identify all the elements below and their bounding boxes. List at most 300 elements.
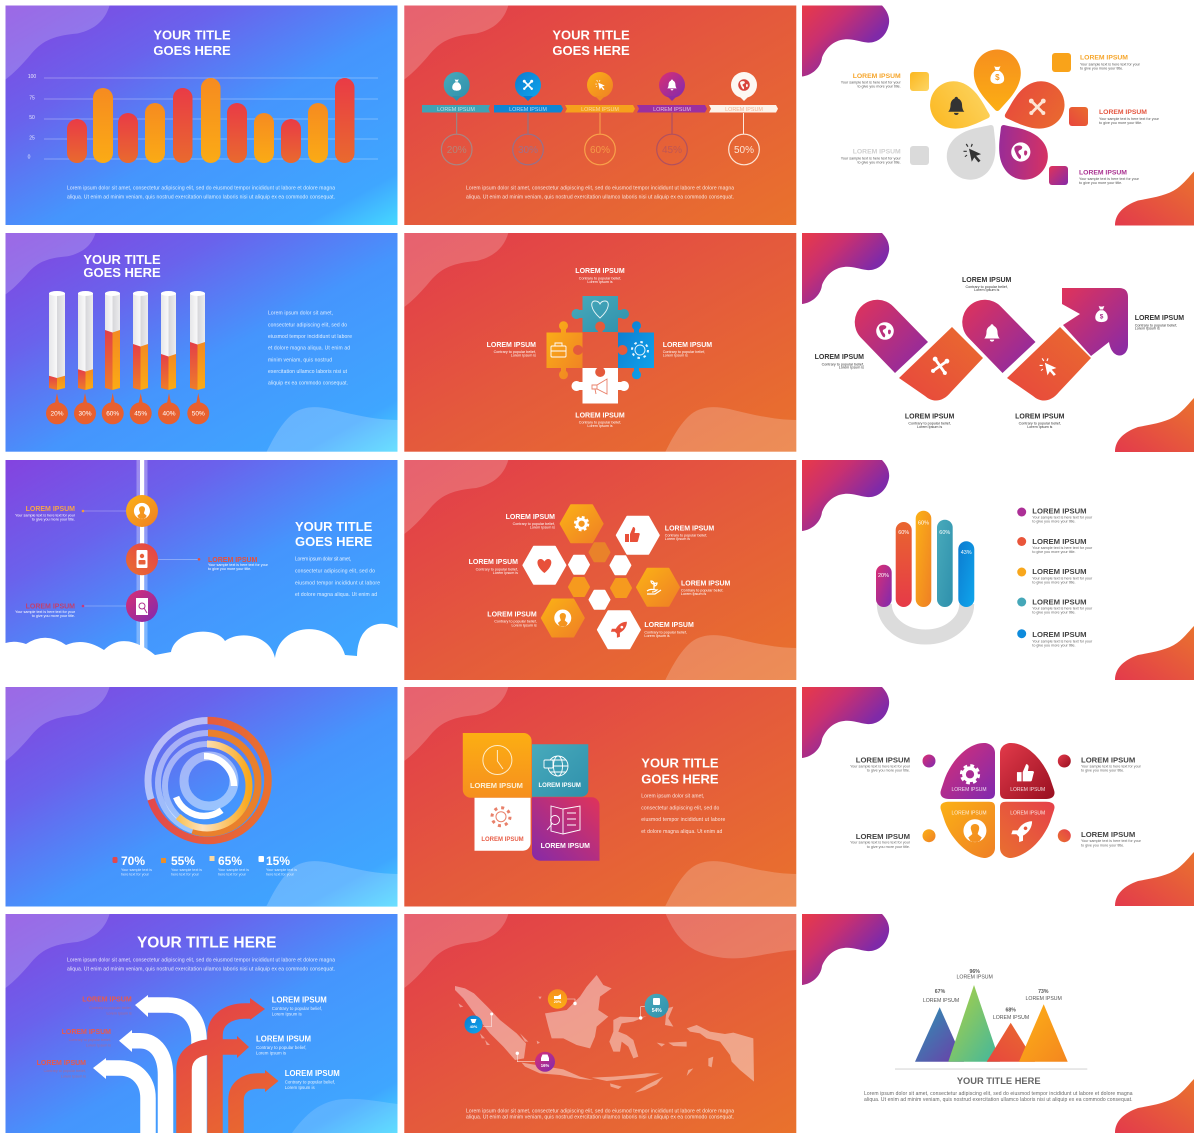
legend: purple (1049, 166, 1140, 185)
legend: red: to give you more your title. (1099, 121, 1142, 125)
legend 70%: here text for your (121, 872, 150, 876)
legend: red: Your sample text is here text for your (1099, 117, 1160, 121)
legend row 5: to give you more your title. (1032, 644, 1076, 648)
label: top (962, 277, 1012, 292)
legend: orange (1052, 53, 1141, 72)
panel: white triangle chart slide (802, 914, 1194, 1133)
card: clock: LOREM IPSUM (470, 781, 523, 790)
hand chart: 60% (918, 520, 929, 526)
legend row 4 (1017, 598, 1093, 614)
triangle labels: 67% (935, 989, 946, 995)
body text (295, 556, 380, 598)
body text: Lorem ipsum dolor sit amet, (641, 794, 704, 800)
label: bottom left: LOREM IPSUM (856, 832, 910, 841)
label: left: Lorem Ipsum is (511, 354, 536, 358)
pin: teal 54%: 54% (652, 1008, 662, 1014)
label 3: Lorem Ipsum is (493, 571, 518, 575)
timeline step 1 (422, 72, 490, 165)
body text: Lorem ipsum dolor sit amet, consectetur adipiscing elit, sed do eiusmod tempor incididunt ut labore et dolore magna (67, 186, 335, 192)
legend row 1: to give you more your title. (1032, 520, 1076, 524)
title: your title here: YOUR TITLE HERE (957, 1076, 1041, 1086)
title: your title goes here (83, 252, 161, 280)
title: your title goes here (295, 519, 373, 549)
milestone 2: LOREM IPSUM (208, 557, 258, 564)
label: top: LOREM IPSUM (962, 277, 1012, 284)
legend row 2: LOREM IPSUM (1032, 537, 1087, 546)
body text: consectetur adipiscing elit, sed do (641, 806, 720, 812)
left label 3: LOREM IPSUM (37, 1060, 86, 1067)
label 5: Contrary to popular belief, (494, 620, 537, 624)
pin: orange 20% (548, 989, 577, 1009)
label: top: Lorem Ipsum is (587, 280, 613, 284)
legend: purple: Your sample text is here text for your (1079, 177, 1140, 181)
body text: et dolore magna aliqua. Ut enim ad (295, 592, 377, 598)
milestone 3 (15, 590, 158, 622)
timeline step 4: LOREM IPSUM (653, 107, 691, 113)
label 3: Contrary to popular belief, (476, 568, 518, 572)
percentage pins: 60% (106, 411, 119, 418)
legend: yellow: to give you more your title. (857, 84, 901, 88)
label: top: Lorem Ipsum is (974, 288, 999, 292)
label 3 (469, 559, 518, 575)
title: your title goes here: GOES HERE (83, 265, 161, 280)
legend 65%: here text for your (218, 872, 247, 876)
body text (466, 186, 734, 200)
left label 3 (37, 1060, 86, 1078)
milestone 1: LOREM IPSUM (26, 506, 75, 513)
timeline step 5: LOREM IPSUM (725, 107, 763, 113)
body text: Lorem ipsum dolor sit amet, (295, 556, 351, 562)
legend: orange: LOREM IPSUM (1080, 54, 1128, 62)
body text: eiusmod tempor incididunt ut labore (641, 817, 726, 823)
right label 1: Contrary to popular belief, (272, 1006, 322, 1011)
body text: et dolore magna aliqua. Ut enim ad (268, 346, 350, 352)
bar chart: 0 (28, 154, 31, 160)
legend: gray: LOREM IPSUM (853, 148, 901, 156)
legend 70%: 70% (121, 854, 145, 868)
legend 65% (210, 854, 249, 876)
legend 55%: 55% (171, 854, 195, 868)
legend: red: LOREM IPSUM (1099, 109, 1147, 116)
label: top left (850, 754, 936, 773)
panel: blue concentric rings slide (6, 687, 398, 906)
quadrant diagram: LOREM IPSUM (951, 810, 987, 816)
right label 1: LOREM IPSUM (272, 996, 327, 1004)
label: bottom left: Lorem Ipsum is (917, 425, 942, 429)
label: top left: LOREM IPSUM (856, 756, 910, 764)
zigzag arrow diagram: $ (1100, 314, 1104, 320)
label 2: LOREM IPSUM (665, 526, 714, 532)
label 4: Contrary to popular belief, (681, 589, 723, 593)
card: globe (532, 744, 588, 797)
label: bottom left: Your sample text is here text for your (850, 841, 911, 845)
left label 1: Lorem Ipsum is (106, 1012, 132, 1016)
legend row 4: LOREM IPSUM (1032, 598, 1087, 606)
left label 2: Lorem Ipsum is (86, 1044, 111, 1048)
triangle labels: LOREM IPSUM (957, 974, 993, 980)
label: bottom right: Lorem Ipsum is (1027, 425, 1053, 429)
right label 2 (256, 1034, 311, 1056)
panel: blue sky timeline slide (6, 460, 398, 681)
label 6 (644, 622, 694, 638)
label 1: Contrary to popular belief, (513, 522, 555, 526)
label 1: Lorem Ipsum is (530, 526, 555, 530)
panel: red cards slide (404, 687, 796, 906)
legend: orange: Your sample text is here text for your (1080, 62, 1141, 66)
body text: aliquip ex ea commodo consequat. (268, 381, 348, 387)
body text: exercitation ullamco laboris nisi ut (268, 369, 348, 375)
timeline step 2 (494, 72, 563, 165)
label: bottom left: to give you more your title. (867, 845, 910, 849)
card: gear (474, 798, 531, 851)
legend 70% (112, 854, 152, 876)
hand chart (876, 511, 974, 637)
body text: et dolore magna aliqua. Ut enim ad (641, 829, 723, 835)
title: your title goes here: YOUR TITLE (153, 28, 231, 42)
body text: aliqua. Ut enim ad minim veniam, quis nostrud exercitation ullamco laboris nisi ut aliquip ex ea commodo consequat. (466, 194, 734, 200)
legend: red (1069, 107, 1160, 126)
title: your title goes here: YOUR TITLE (83, 252, 161, 267)
label: bottom left (850, 829, 936, 849)
label: right (1135, 315, 1184, 331)
timeline step 3: 60% (590, 145, 610, 156)
pin: blue 40%: 40% (470, 1025, 478, 1029)
label: top left: to give you more your title. (867, 769, 910, 773)
legend row 2 (1017, 537, 1093, 554)
right label 3: Lorem Ipsum is (285, 1085, 316, 1090)
body text: consectetur adipiscing elit, sed do (295, 568, 375, 574)
timeline step 3: LOREM IPSUM (581, 107, 619, 113)
legend 15%: Your sample text is (266, 868, 297, 872)
label: bottom left: LOREM IPSUM (905, 414, 954, 420)
milestone 3: Your sample text is here text for your (15, 610, 76, 614)
body text: Lorem ipsum dolor sit amet, (268, 310, 333, 316)
label: bottom: Contrary to popular belief, (579, 420, 621, 424)
right label 3: Contrary to popular belief, (285, 1080, 335, 1084)
timeline step 1: 20% (447, 145, 467, 156)
body text: minim veniam, quis nostrud (268, 358, 332, 364)
left label 3: Lorem Ipsum is (61, 1074, 86, 1078)
milestone 1: Your sample text is here text for your (15, 514, 76, 518)
card: book: LOREM IPSUM (541, 843, 590, 850)
timeline step 5 (709, 72, 778, 165)
milestone 1: to give you more your title. (32, 518, 75, 522)
label: top right: Your sample text is here text for your (1081, 764, 1142, 768)
title: your title goes here: GOES HERE (153, 43, 231, 58)
vertical beam (136, 460, 148, 655)
label: left: LOREM IPSUM (815, 354, 864, 361)
pin: teal 54% (639, 994, 669, 1020)
left label 1: Contrary to popular belief, (89, 1006, 132, 1010)
legend 65%: 65% (218, 854, 242, 868)
body text: Lorem ipsum dolor sit amet, consectetur adipiscing elit, sed do eiusmod tempor incididunt ut labore et dolore magna (67, 958, 335, 964)
timeline step 3 (565, 72, 635, 165)
legend: orange: to give you more your title. (1080, 66, 1123, 70)
panel: blue bar chart slide (6, 6, 398, 225)
label: bottom left: Contrary to popular belief, (908, 422, 951, 426)
legend row 3: LOREM IPSUM (1032, 567, 1087, 576)
triangle chart (915, 985, 1068, 1062)
hexagon icons (537, 517, 661, 638)
white arrows (93, 995, 199, 1133)
body text: aliqua. Ut enim ad minim veniam, quis nostrud exercitation ullamco laboris nisi ut aliquip ex ea commodo consequat. (466, 1114, 734, 1120)
legend row 3 (1017, 567, 1093, 584)
label: bottom: Lorem Ipsum is (587, 424, 613, 428)
label 4 (681, 580, 731, 596)
body text: aliqua. Ut enim ad minim veniam, quis nostrud exercitation ullamco laboris nisi ut aliquip ex ea commodo consequat. (864, 1097, 1132, 1103)
baseline (895, 1068, 1087, 1070)
label: top right (1058, 754, 1142, 773)
label 6: Contrary to popular belief, (644, 630, 687, 634)
title: your title goes here: GOES HERE (641, 772, 719, 786)
panel: white flower slide (802, 6, 1194, 226)
card: clock (463, 733, 532, 798)
label: top right: to give you more your title. (1081, 769, 1124, 773)
label 3: LOREM IPSUM (469, 559, 518, 566)
timeline step 2: LOREM IPSUM (509, 107, 547, 113)
quadrant diagram: LOREM IPSUM (1010, 787, 1045, 793)
panel: blue arrows slide (6, 914, 398, 1133)
panel: red puzzle slide (404, 233, 796, 452)
panel: white hand chart slide (802, 460, 1194, 680)
timeline step 4: 45% (662, 145, 682, 156)
panel: red hexagon slide (404, 460, 796, 680)
bar chart (28, 74, 378, 163)
label 2 (665, 526, 714, 541)
title: your title goes here: YOUR TITLE (295, 519, 373, 534)
milestone 3: to give you more your title. (32, 614, 75, 618)
legend row 3: Your sample text is here text for your (1032, 576, 1093, 580)
label 5: LOREM IPSUM (487, 612, 537, 618)
right label 3 (285, 1069, 340, 1090)
label: top right: LOREM IPSUM (1081, 756, 1135, 764)
label: right: LOREM IPSUM (663, 342, 712, 349)
body text: eiusmod tempor incididunt ut labore (295, 580, 380, 586)
left label 1 (82, 996, 132, 1016)
body text: aliqua. Ut enim ad minim veniam, quis nostrud exercitation ullamco laboris nisi ut aliquip ex ea commodo consequat. (67, 966, 335, 972)
label: top (575, 268, 625, 284)
body text (67, 958, 335, 972)
percentage pins: 30% (78, 411, 92, 418)
percentage pins: 50% (192, 411, 205, 418)
title: your title goes here: YOUR TITLE (552, 28, 630, 42)
body text (864, 1091, 1133, 1103)
legend 15%: here text for your (266, 872, 295, 876)
timeline step 1: LOREM IPSUM (437, 107, 475, 113)
label 5: Lorem Ipsum is (511, 624, 537, 628)
label: bottom right: LOREM IPSUM (1015, 414, 1065, 420)
flower diagram (924, 50, 1071, 189)
legend: gray: Your sample text is here text for your (841, 156, 901, 160)
label: right: Lorem Ipsum is (1135, 327, 1160, 331)
label: right: Contrary to popular belief, (1135, 324, 1177, 328)
legend row 5: Your sample text is here text for your (1032, 640, 1093, 644)
label: bottom: LOREM IPSUM (575, 412, 625, 420)
body text: Lorem ipsum dolor sit amet, consectetur adipiscing elit, sed do eiusmod tempor incididunt ut labore et dolore magna (466, 186, 734, 192)
body text: aliqua. Ut enim ad minim veniam, quis nostrud exercitation ullamco laboris nisi ut aliquip ex ea commodo consequat. (67, 194, 335, 200)
hand chart: 60% (898, 530, 909, 536)
right label 3: LOREM IPSUM (285, 1069, 340, 1078)
legend: purple: LOREM IPSUM (1079, 170, 1127, 176)
quadrant diagram (940, 743, 1055, 858)
label: top: Contrary to popular belief, (965, 285, 1008, 289)
title: your title goes here (153, 28, 231, 58)
right label 2: Contrary to popular belief, (256, 1045, 307, 1050)
triangle labels: LOREM IPSUM (993, 1015, 1029, 1021)
right label 2: Lorem Ipsum is (256, 1050, 287, 1056)
card: globe: LOREM IPSUM (539, 783, 581, 789)
timeline step 4 (637, 72, 707, 165)
legend 55%: Your sample text is (171, 868, 202, 872)
label: top: LOREM IPSUM (575, 268, 625, 275)
hand chart: 20% (878, 573, 889, 579)
left label 2 (62, 1029, 111, 1048)
body text (268, 310, 352, 387)
label 2: Contrary to popular belief, (665, 534, 707, 538)
legend 55% (161, 854, 202, 876)
triangle labels: 96% (970, 969, 980, 975)
panel: white quadrant slide (802, 687, 1194, 906)
quadrant diagram: LOREM IPSUM (951, 787, 987, 793)
left label 2: Contrary to popular belief, (69, 1038, 111, 1042)
legend row 1: Your sample text is here text for your (1032, 516, 1093, 520)
hand chart: 60% (939, 530, 950, 536)
body text (466, 1108, 734, 1120)
timeline step 5: 50% (734, 145, 754, 156)
legend: yellow: Your sample text is here text for your (841, 80, 901, 84)
label: bottom right (1058, 829, 1142, 847)
legend row 5 (1017, 629, 1093, 648)
clouds (6, 624, 398, 681)
body text: Lorem ipsum dolor sit amet, consectetur adipiscing elit, sed do eiusmod tempor incididunt ut labore et dolore magna (466, 1108, 734, 1114)
legend row 2: to give you more your title. (1032, 550, 1076, 554)
legend: yellow: LOREM IPSUM (853, 73, 901, 80)
legend row 3: to give you more your title. (1032, 580, 1076, 584)
legend row 1 (1017, 506, 1093, 524)
triangle labels: LOREM IPSUM (1026, 996, 1062, 1002)
timeline step 2: 30% (518, 145, 538, 156)
quadrant diagram: LOREM IPSUM (1010, 810, 1045, 816)
panel: red map slide (404, 914, 796, 1133)
label 4: Lorem Ipsum is (681, 592, 706, 596)
legend row 4: to give you more your title. (1032, 610, 1076, 614)
label: right (663, 342, 712, 358)
right label 2: LOREM IPSUM (256, 1034, 311, 1044)
label: left: Contrary to popular belief, (494, 350, 536, 354)
label: left: LOREM IPSUM (487, 342, 536, 349)
label: right: LOREM IPSUM (1135, 315, 1184, 322)
milestone 2 (126, 543, 269, 575)
body text: Lorem ipsum dolor sit amet, consectetur adipiscing elit, sed do eiusmod tempor incididunt ut labore et dolore magna (864, 1091, 1133, 1097)
body text: consectetur adipiscing elit, sed do (268, 322, 347, 328)
pin: orange 20%: 20% (554, 1000, 562, 1004)
title: your title goes here: GOES HERE (552, 43, 630, 58)
triangle labels: 68% (1006, 1008, 1016, 1014)
card: gear: LOREM IPSUM (481, 837, 524, 843)
triangle labels (923, 969, 1062, 1021)
label 1 (506, 514, 555, 530)
legend 15%: 15% (266, 854, 290, 868)
map of Indonesia (455, 975, 754, 1093)
left label 3: Contrary to popular belief, (44, 1069, 86, 1073)
right label 1: Lorem Ipsum is (272, 1012, 303, 1016)
percentage pins: 40% (162, 411, 176, 418)
pin: purple 16% (516, 1052, 555, 1072)
card: book (532, 797, 600, 861)
milestone 3: LOREM IPSUM (26, 604, 75, 610)
legend 65%: Your sample text is (218, 868, 249, 872)
triangle labels: 73% (1038, 989, 1049, 995)
body text (641, 794, 726, 835)
legend: gray: to give you more your title. (857, 160, 901, 164)
bar chart: 50 (29, 115, 35, 121)
legend 70%: Your sample text is (121, 868, 152, 872)
hand chart: 43% (961, 550, 972, 556)
percentage pins: 45% (134, 411, 147, 418)
legend 15% (258, 854, 297, 876)
label: bottom right: LOREM IPSUM (1081, 830, 1135, 839)
label: left (487, 342, 536, 358)
label 4: LOREM IPSUM (681, 580, 731, 588)
label: bottom right: Contrary to popular belief, (1019, 422, 1061, 426)
title: your title goes here (552, 28, 630, 58)
label 2: Lorem Ipsum is (665, 537, 690, 541)
milestone 1 (15, 495, 158, 527)
label: right: Contrary to popular belief, (663, 350, 705, 354)
label 5 (487, 612, 537, 628)
label: bottom (575, 412, 625, 428)
label: bottom left (905, 414, 954, 429)
label: right: Lorem Ipsum is (663, 354, 688, 358)
label: top: Contrary to popular belief, (579, 276, 621, 280)
label: left: Lorem Ipsum is (839, 366, 864, 370)
legend row 5: LOREM IPSUM (1032, 630, 1087, 639)
milestone 2: Your sample text is here text for your (208, 563, 269, 567)
label: bottom right (1015, 414, 1065, 429)
label: bottom right: Your sample text is here text for your (1081, 839, 1142, 843)
left label 2: LOREM IPSUM (62, 1029, 111, 1036)
legend: yellow (841, 72, 929, 91)
body text (67, 186, 335, 200)
title: your title goes here: YOUR TITLE (641, 756, 719, 770)
label 1: LOREM IPSUM (506, 514, 555, 521)
panel: blue isometric columns slide (6, 233, 398, 452)
isometric column chart (49, 291, 205, 390)
panel: white zigzag arrow slide (802, 233, 1194, 452)
percentage pins (46, 393, 209, 424)
right label 1 (272, 996, 327, 1016)
bar chart: 25 (29, 136, 35, 142)
legend row 2: Your sample text is here text for your (1032, 546, 1093, 550)
title: your title goes here (641, 756, 719, 786)
pin: blue 40% (464, 1012, 493, 1034)
legend: purple: to give you more your title. (1079, 181, 1122, 185)
label: left (815, 354, 864, 370)
label: bottom right: to give you more your title. (1081, 843, 1124, 847)
legend row 1: LOREM IPSUM (1032, 506, 1087, 516)
milestone 2: to give you more your title. (208, 567, 251, 571)
title: your title goes here: GOES HERE (295, 534, 373, 549)
legend: gray (841, 146, 929, 165)
bar chart: 100 (28, 74, 36, 80)
legend 55%: here text for your (171, 872, 200, 876)
bar chart: 75 (29, 96, 35, 102)
triangle labels: LOREM IPSUM (923, 998, 959, 1004)
label 6: Lorem Ipsum is (644, 634, 670, 638)
title: your title here: YOUR TITLE HERE (137, 934, 276, 952)
hexagon diagram (523, 505, 679, 648)
label: top left: Your sample text is here text for your (850, 764, 911, 768)
